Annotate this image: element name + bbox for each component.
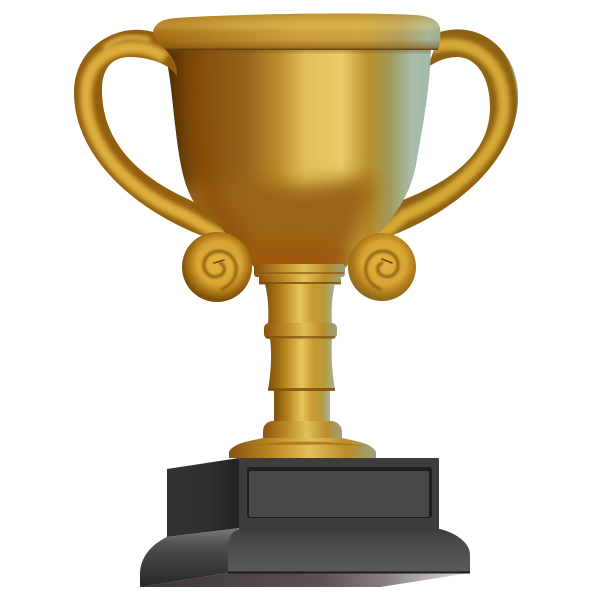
bowl left warm band xyxy=(192,52,245,250)
base underside xyxy=(140,573,470,587)
collar xyxy=(254,264,345,284)
right scroll xyxy=(348,233,416,301)
base lower front xyxy=(228,529,470,573)
trophy illustration xyxy=(74,14,518,587)
bowl lower shade xyxy=(180,178,375,275)
left scroll xyxy=(182,232,252,302)
foot upper xyxy=(263,421,342,442)
bowl xyxy=(165,48,431,268)
foot lower xyxy=(229,438,376,458)
left handle xyxy=(74,30,232,242)
stem knob xyxy=(264,323,337,339)
base xyxy=(140,458,470,587)
base left flare xyxy=(140,528,240,587)
stem xyxy=(229,284,376,458)
right handle xyxy=(375,29,519,240)
rim xyxy=(153,14,440,50)
base nameplate xyxy=(247,467,432,518)
base left side xyxy=(167,458,240,537)
bowl warm base glow xyxy=(250,242,352,268)
bowl under-rim shadow xyxy=(166,50,431,54)
base front xyxy=(239,458,439,530)
